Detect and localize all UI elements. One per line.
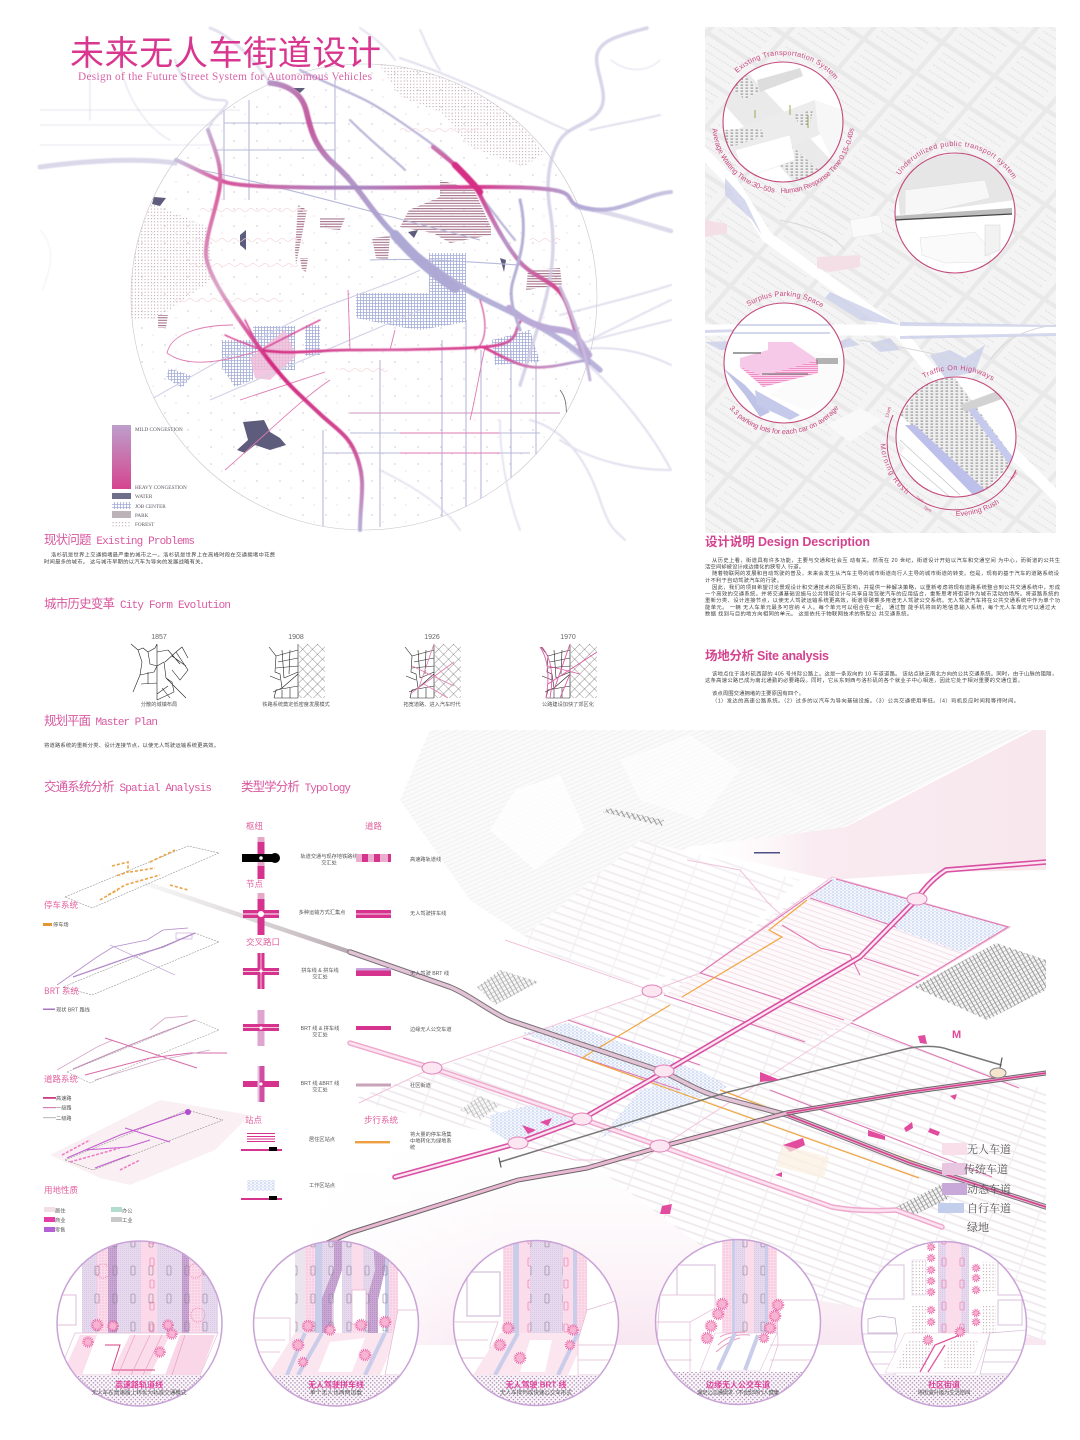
typology: BRT and carpool junction	[243, 1010, 452, 1046]
text: design description: 随着物联网的发展和自动驾驶的普及，未来会发生从汽车主导的城市街道向行人主导的城市街道的转变。但是，现有的基于汽车的道路系统设	[712, 569, 1060, 577]
text: design description	[705, 534, 1061, 618]
typology: hub: 道路	[365, 820, 383, 832]
typology: node: 节点	[246, 878, 264, 890]
typology: intersection: 拼车线 & 拼车线	[301, 966, 339, 974]
street section 4	[650, 1240, 830, 1410]
diagram: land use: 零售	[55, 1226, 65, 1234]
callout: surplus parking space: 3.3 parking lots for each car on average	[730, 406, 838, 434]
panel: isometric city analysis	[700, 27, 1060, 533]
heading: master plan	[44, 710, 219, 749]
typology: BRT and carpool junction: 交汇处	[312, 1030, 328, 1038]
legend: congestion	[112, 425, 187, 528]
diagram: road system: 高速路	[56, 1094, 72, 1102]
map evolution 1908: 1908	[288, 634, 304, 641]
street section 1	[50, 1240, 230, 1410]
street section 1: 无人车在高速路上转化为轨道交通模式	[92, 1388, 187, 1396]
callout: traffic on highways: Traffic On Highways	[922, 365, 994, 380]
callout: traffic on highways: 4am	[1009, 471, 1019, 481]
callout: traffic on highways: 12am	[884, 406, 892, 418]
typology: pedestrian system: 中地转化为绿地系	[410, 1136, 452, 1144]
diagram: parking system	[43, 846, 219, 928]
text: design description: 活空间却被设计成边缘化的狭窄人 行道。	[705, 562, 804, 570]
diagram: land use: 办公	[122, 1206, 132, 1214]
street section 4: 满足公交通需求（不会影响行人健康	[697, 1388, 779, 1396]
typology: intersection	[243, 936, 449, 989]
street section 5	[855, 1240, 1035, 1410]
street section 3	[450, 1240, 630, 1410]
callout: underutilized public transport: Underutilized public transport system	[896, 140, 1016, 179]
typology: BRT and carpool junction: BRT 线 & 拼车线	[301, 1024, 339, 1032]
text: site analysis: （1）发达的高速公路系统。（2）过多的以汽车为导向基础设施。（3）公共交通使用率低。（4）司机反应时间和等待时间。	[712, 696, 1019, 704]
map evolution 1926: 1926	[424, 634, 440, 641]
callout: surplus parking space	[723, 290, 845, 434]
typology: pedestrian system: 统	[410, 1143, 415, 1151]
outer lavender traffic flows	[40, 28, 671, 540]
typology: hub: 枢纽	[246, 820, 264, 832]
map evolution 1970: 公路建设加快了郊区化	[542, 700, 594, 708]
diagram: BRT system	[43, 928, 219, 1014]
map evolution 1857: 1857	[151, 634, 167, 641]
text: design description: 能单元。 一辆 无人车单元最多可容纳 4 人。每个单元可以组合在一起， 通过智 能手机将目的地信息输入系统，每个无人车单元可以通过大	[705, 603, 1057, 611]
typology: BRT and BRT junction: 交汇处	[312, 1086, 328, 1094]
diagram: BRT system: 现状 BRT 路线	[56, 1006, 90, 1014]
heading: typology: 类型学分析 Typology	[241, 776, 351, 795]
typology: hub: 轨道交通与现存地铁路线	[300, 852, 358, 860]
legend: lane types	[938, 1141, 1011, 1235]
typology: BRT and BRT junction	[243, 1066, 431, 1102]
typology: pedestrian system	[355, 1114, 452, 1151]
legend: lane types: 传统车道	[964, 1161, 1008, 1177]
diagram: road system	[43, 1016, 227, 1122]
typology: pedestrian system: 将大量的停车场集	[410, 1130, 452, 1138]
callout: traffic on highways: Morning Rush	[880, 444, 908, 494]
diagram: land use	[44, 1100, 250, 1234]
legend: congestion: MILD CONGESTION	[135, 427, 183, 433]
title: Design of the Future Street System for Autonomous Vehicles	[78, 71, 372, 83]
map evolution 1926: 拓宽道路、进入汽车时代	[403, 700, 461, 708]
text: design description: 一个高效的交通系统。并将交通基础设施与公共领域设计与共享自动驾驶汽车的应用结合，重新思考将街道作为城市活动的场所。将道路系统的	[705, 590, 1059, 598]
text: site analysis: 场地分析 Site analysis	[705, 648, 829, 663]
text: site analysis	[705, 648, 1057, 704]
legend: lane types: 自行车道	[967, 1200, 1011, 1216]
typology: stations: 站点	[245, 1114, 263, 1126]
map evolution 1926	[403, 634, 461, 708]
typology: node: 无人驾驶拼车线	[410, 909, 446, 917]
diagram: road system: 二级路	[56, 1114, 72, 1122]
typology: pedestrian system: 步行系统	[364, 1114, 399, 1126]
diagram: parking system: 停车系统	[44, 899, 79, 911]
typology: stations: 工作区站点	[309, 1181, 335, 1189]
diagram: BRT system: BRT 系统	[44, 985, 79, 997]
heading: master plan: 规划平面 Master Plan	[44, 710, 158, 729]
heading: master plan: 将道路系统的重新分类、设计连接节点，以使无人驾驶运输系统更高效。	[44, 741, 219, 749]
typology: BRT and BRT junction: BRT 线 &BRT 线	[301, 1079, 339, 1087]
map evolution 1970	[540, 634, 597, 708]
text: design description: 因此，我们的项目希望讨论景观设计和交通技术的相互影响，并提供一种解决策略，以重新考虑将现有道路系统整合到公共交通系统中，形成	[712, 583, 1061, 591]
heading: existing problems	[44, 529, 275, 566]
legend: congestion: HEAVY CONGESTION	[135, 485, 187, 491]
legend: lane types: 动态车道	[967, 1181, 1011, 1197]
text: design description: 设计说明 Design Description	[705, 534, 870, 549]
diagram: land use: 居住	[55, 1206, 65, 1214]
diagram: land use: 商业	[55, 1216, 65, 1224]
typology: hub	[242, 820, 441, 879]
typology: stations: 居住区站点	[309, 1135, 335, 1143]
street section 2: 无人驾驶拼车线	[308, 1380, 364, 1390]
typology: hub: 交汇处	[321, 858, 337, 866]
typology: intersection: 交叉路口	[246, 936, 280, 948]
typology: intersection: 无人驾驶 BRT 线	[410, 969, 449, 977]
circular congestion map	[40, 28, 671, 540]
legend: congestion: PARK	[135, 513, 149, 519]
text: site analysis: 该点周围交通拥堵的主要原因有四个。	[712, 689, 804, 697]
diagram: land use: 工业	[122, 1216, 132, 1224]
legend: congestion: WATER	[135, 494, 153, 500]
street section 5: 将街道升级为生活空间	[918, 1388, 971, 1396]
text: design description: 从历史上看，街道具有许多功能，主要与交通和社会互 动有关。然而在 20 世纪，街道设计开始以汽车和交通空间 为中心，而街道的公共生	[712, 556, 1061, 564]
street section 3: 无人车排列成快速公交车形式	[500, 1388, 572, 1396]
typology: BRT and BRT junction: 社区街道	[410, 1081, 431, 1089]
callout: existing transportation system	[712, 51, 854, 193]
typology: stations	[241, 1114, 335, 1200]
diagram: parking system: 停车场	[53, 920, 69, 928]
callout: traffic on highways	[880, 365, 1019, 516]
callout: traffic on highways: 7pm	[922, 505, 933, 513]
heading: existing problems: 时间最多的城市。 这与城市早期的以汽车为导向的发展战略有关。	[44, 558, 206, 566]
title: 未来无人车街道设计	[70, 26, 381, 75]
map evolution 1908: 铁路系统奠定低密度发展模式	[262, 700, 331, 708]
street section 2	[250, 1240, 430, 1410]
legend: congestion: JOB CENTER	[135, 504, 166, 510]
street section 3: 无人驾驶 BRT 线	[506, 1380, 566, 1390]
callout: existing transportation system: Average Waiting Time:30–50s	[712, 128, 774, 192]
map evolution 1857	[131, 634, 188, 708]
map evolution 1857: 分散的城镇布局	[141, 700, 177, 708]
diagram: land use: 用地性质	[44, 1184, 79, 1196]
label: M metro: M	[952, 1029, 961, 1041]
callout: surplus parking space: Surplus Parking Space	[746, 290, 824, 307]
typology: node: 多种运输方式汇集点	[299, 908, 345, 916]
diagram: road system: 道路系统	[44, 1073, 79, 1085]
text: design description: 数据 找到与目的地方向相同的单元。 这是依托于物联网技术的新型公 共交通系统。	[705, 610, 912, 618]
callout: traffic on highways: 7am	[914, 495, 925, 503]
callout: underutilized public transport	[894, 140, 1016, 274]
master plan site map	[97, 730, 1046, 1345]
street section 1: 高速路轨道线	[115, 1380, 163, 1390]
map evolution 1970: 1970	[560, 634, 576, 641]
typology: node	[243, 878, 446, 935]
legend: lane types: 无人车道	[967, 1141, 1011, 1157]
heading: city form evolution: 城市历史变革 City Form Evolution	[44, 593, 231, 612]
heading: spatial analysis: 交通系统分析 Spatial Analysis	[44, 776, 212, 795]
text: site analysis: 该地点位于洛杉矶西部的 405 号州际公路上。这是一条双向的 10 车道道路。 该站点缺乏南北方向的公共交通系统。同时，由于山脉的阻隔，	[712, 670, 1057, 678]
text: design description: 计不利于自动驾驶汽车的行驶。	[705, 576, 782, 584]
text: design description: 重新分类、设计连接节点，以使无人驾驶运输系统更高效，街道零碳乘多用途无人驾驶公交系统。无人驾驶汽车将在公共交通系统中作为单个功	[705, 596, 1060, 604]
typology: intersection: 交汇处	[312, 972, 328, 980]
street section 4: 边缘无人公交车道	[706, 1380, 770, 1390]
street section 5: 社区街道	[928, 1380, 960, 1390]
heading: existing problems: 现状问题 Existing Problems	[44, 529, 195, 548]
map evolution 1908	[262, 634, 331, 708]
main highway corridors	[176, 70, 671, 530]
text: site analysis: 这条高速公路已成为南北通勤的必要路段。同时，它从东到西与洛杉矶的各个就业子中心相连，因此它处于相对重要的交通位置。	[705, 676, 1023, 684]
callout: existing transportation system: Existing Transportation System	[734, 51, 838, 80]
typology: BRT and carpool junction: 边缘无人公交车道	[410, 1025, 452, 1033]
callout: traffic on highways: Evening Rush	[956, 500, 1000, 516]
legend: lane types: 绿地	[967, 1219, 989, 1235]
street section 2: 单个无人也两两加载	[310, 1388, 362, 1396]
heading: existing problems: 洛杉矶是世界上交通拥堵最严重的城市之一。洛杉矶是世界上在高峰时段在交通拥堵中花费	[51, 550, 275, 558]
legend: congestion: FOREST	[135, 522, 155, 528]
callout: existing transportation system: Human Response Time:0.15–0.40s	[781, 128, 854, 193]
diagram: road system: 一级路	[56, 1104, 72, 1112]
typology: hub: 高速路轨道线	[410, 855, 441, 863]
